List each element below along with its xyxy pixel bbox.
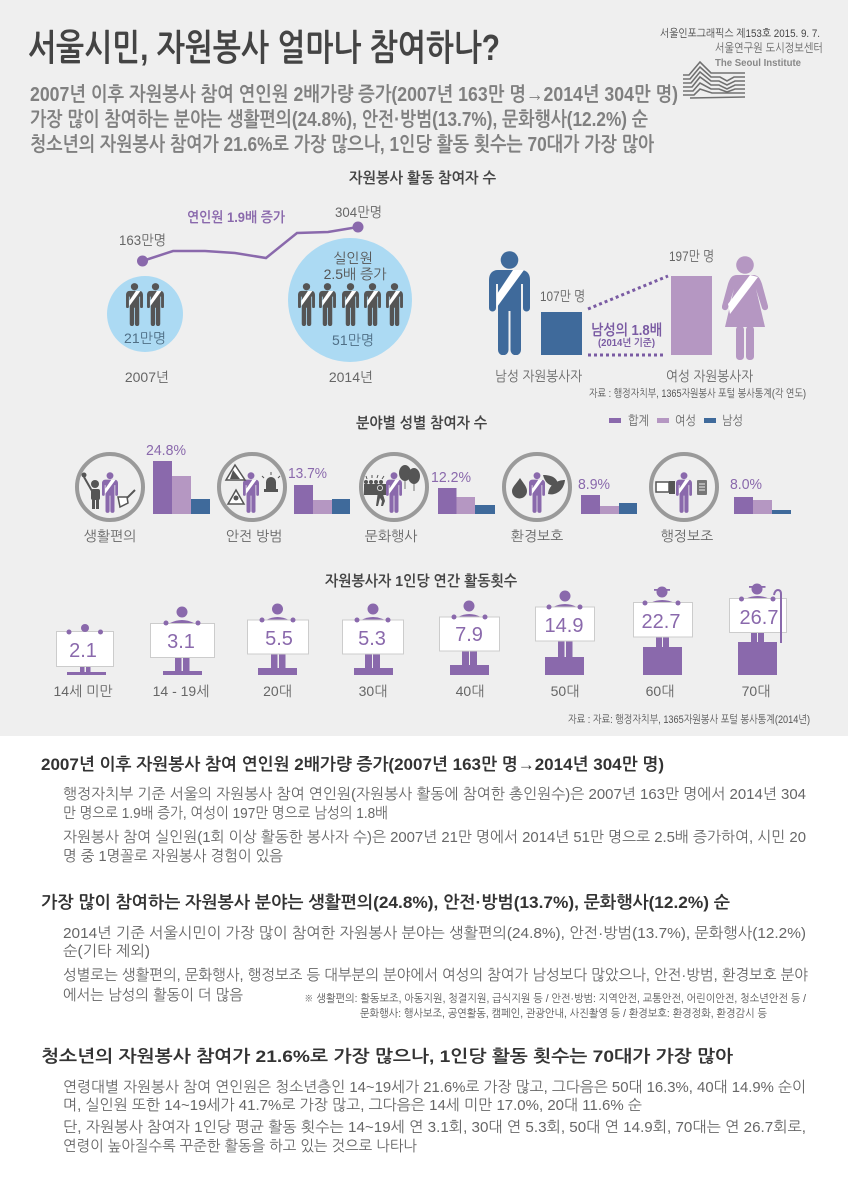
legend xyxy=(609,413,743,428)
heading: field: 분야별 성별 참여자 수 xyxy=(356,415,487,432)
text section 3: 단, 자원봉사 참여자 1인당 평균 활동 횟수는 14~19세 연 3.1회, 30대 연 5.3회, 50대 연 14.9회, 70대는 연 26.7회로, xyxy=(63,1119,806,1136)
footnote xyxy=(304,992,807,1020)
age: 70s xyxy=(730,584,786,699)
text section 1: 2007년 이후 자원봉사 참여 연인원 2배가량 증가(2007년 163만 명→2014년 304만 명) xyxy=(41,755,664,774)
category: 문화행사: 12.2% xyxy=(431,469,471,486)
bars xyxy=(438,488,495,514)
category: 생활편의: 생활편의 xyxy=(84,528,136,544)
age: 60s: 60대 xyxy=(646,683,674,699)
icon: admin support xyxy=(651,454,717,520)
age: 30s: 30대 xyxy=(359,683,387,699)
age: 20s: 5.5 xyxy=(265,628,293,650)
bubble: 2014 xyxy=(288,238,412,385)
legend: 남성 xyxy=(722,413,743,428)
age: 30s: 5.3 xyxy=(358,628,386,650)
age: 20s xyxy=(248,604,308,699)
icon: environment xyxy=(504,454,570,520)
age: 70s: 26.7 xyxy=(740,607,778,629)
text section 1: 자원봉사 참여 실인원(1회 이상 활동한 봉사자 수)은 2007년 21만 명에서 2014년 51만 명으로 2.5배 증가하여, 시민 20 xyxy=(63,829,806,846)
age: 40s xyxy=(440,600,500,699)
text section 3: 연령대별 자원봉사 참여 연인원은 청소년층인 14~19세가 21.6%로 가장 많고, 그다음은 50대 16.3%, 40대 14.9% 순이 xyxy=(63,1079,806,1096)
bar: male xyxy=(541,312,582,355)
title: 서울시민, 자원봉사 얼마나 참여하나? xyxy=(28,27,500,68)
logo: The Seoul Institute: 서울연구원 도시정보센터 xyxy=(715,41,823,55)
infographic background panel xyxy=(0,0,848,736)
value labels: 107만 명 xyxy=(540,288,585,304)
category: 문화행사: 문화행사 xyxy=(365,528,418,544)
text section 2: 순(기타 제외) xyxy=(63,943,150,960)
value labels: 남성 자원봉사자 xyxy=(495,368,583,384)
footnote: ※ 생활편의: 활동보조, 아동지원, 청결지원, 급식지원 등 / 안전·방범: 지역안전, 교통안전, 어린이안전, 청소년안전 등 / xyxy=(304,992,807,1005)
age: 20s: 20대 xyxy=(263,683,292,699)
category: 환경보호: 8.9% xyxy=(578,476,610,493)
value labels xyxy=(495,248,754,384)
value labels: 여성 자원봉사자 xyxy=(666,368,754,384)
age: 60s xyxy=(634,586,692,699)
category: 안전 방범: 안전 방범 xyxy=(226,528,282,544)
icon: culture event xyxy=(361,454,427,520)
heading: activity count: 자원봉사자 1인당 연간 활동횟수 xyxy=(325,573,517,590)
bars xyxy=(581,495,637,514)
logo: The Seoul Institute: The Seoul Institute xyxy=(715,58,801,69)
text section 3: 며, 실인원 또한 14~19세가 41.7%로 가장 많고, 그다음은 14세 미만 17.0%, 20대 11.6% 순 xyxy=(63,1097,642,1114)
logo: The Seoul Institute xyxy=(683,41,823,98)
bubble: 2014: 2014년 xyxy=(329,369,373,385)
chart: male vs female volunteers xyxy=(489,248,768,384)
value labels: 남성의 1.8배 xyxy=(591,322,662,339)
text section 1 xyxy=(41,755,806,865)
bubble: 2007: 2007년 xyxy=(125,369,169,385)
age: 50s: 50대 xyxy=(551,683,579,699)
bars xyxy=(153,461,210,514)
age: 70s: 70대 xyxy=(742,683,770,699)
bubble: 2014: 2.5배 증가 xyxy=(324,266,387,282)
age: under 14: 2.1 xyxy=(69,640,97,662)
text section 1: 만 명으로 1.9배 증가, 여성이 197만 명으로 남성의 1.8배 xyxy=(63,805,388,822)
text section 1: 명 중 1명꼴로 자원봉사 경험이 있음 xyxy=(63,848,283,865)
bars xyxy=(294,485,350,514)
category: 문화행사 xyxy=(361,454,495,544)
bubble: 2007: 21만명 xyxy=(124,330,166,346)
subtitle text block: 가장 많이 참여하는 분야는 생활편의(24.8%), 안전·방범(13.7%), 문화행사(12.2%) 순 xyxy=(30,108,648,131)
icon: safety xyxy=(219,454,285,520)
age: 14-19: 14 - 19세 xyxy=(153,683,209,699)
footnote: 문화행사: 행사보조, 공연활동, 캠페인, 관광안내, 사진촬영 등 / 환경보호: 환경정화, 환경감시 등 xyxy=(360,1007,768,1020)
category: 행정보조: 행정보조 xyxy=(661,528,713,544)
heading: participants: 자원봉사 활동 참여자 수 xyxy=(349,170,496,187)
line: cumulative participants: 163만명 xyxy=(119,232,166,248)
text section 3: 청소년의 자원봉사 참여가 21.6%로 가장 많으나, 1인당 활동 횟수는 70대가 가장 많아 xyxy=(41,1047,733,1066)
text section 3: 연령이 높아질수록 꾸준한 활동을 하고 있는 것으로 나타나 xyxy=(63,1138,418,1155)
text section 2: 가장 많이 참여하는 자원봉사 분야는 생활편의(24.8%), 안전·방범(13.7%), 문화행사(12.2%) 순 xyxy=(41,893,730,912)
icon: woman xyxy=(722,256,768,360)
value labels: 197만 명 xyxy=(669,248,714,264)
line: cumulative participants: 연인원 1.9배 증가 xyxy=(187,209,286,225)
bubble: 2007 xyxy=(107,276,183,385)
age: 14-19: 3.1 xyxy=(167,631,195,653)
subtitle text block xyxy=(30,84,678,156)
category: 환경보호: 환경보호 xyxy=(511,528,563,544)
age: 40s: 7.9 xyxy=(455,624,483,646)
age: 50s: 14.9 xyxy=(545,615,583,637)
subtitle text block: 청소년의 자원봉사 참여가 21.6%로 가장 많으나, 1인당 활동 횟수는 70대가 가장 많아 xyxy=(30,133,654,156)
text section 2: 성별로는 생활편의, 문화행사, 행정보조 등 대부분의 분야에서 여성의 참여가 남성보다 많았으나, 안전·방범, 환경보호 분야 xyxy=(63,967,809,984)
category: 행정보조 xyxy=(651,454,791,544)
age: 30s xyxy=(342,604,404,699)
category: 생활편의: 24.8% xyxy=(146,442,186,459)
text section 2 xyxy=(41,893,809,1020)
category: 안전 방범 xyxy=(219,454,350,544)
age: 50s xyxy=(536,590,594,699)
age: 14-19 xyxy=(150,606,214,699)
icon: daily convenience xyxy=(77,454,143,520)
bubble: 2014: 51만명 xyxy=(332,332,374,348)
legend: 여성 xyxy=(675,413,696,428)
category: 행정보조: 8.0% xyxy=(730,476,762,493)
value labels: (2014년 기준) xyxy=(598,337,655,349)
publication info: 서울인포그래픽스 제153호 2015. 9. 7. xyxy=(660,27,820,40)
text section 2: 에서는 남성의 활동이 더 많음 xyxy=(63,987,243,1004)
category: 안전 방범: 13.7% xyxy=(288,465,327,482)
age: under 14: 14세 미만 xyxy=(54,683,112,699)
bar: female xyxy=(671,276,712,355)
bubble: 2014: 실인원 xyxy=(333,250,373,266)
text section 3 xyxy=(41,1047,806,1155)
icon: man xyxy=(489,251,530,355)
age: 40s: 40대 xyxy=(456,683,484,699)
bars xyxy=(734,497,791,514)
comparison dotted lines xyxy=(588,276,668,355)
age: 60s: 22.7 xyxy=(642,611,680,633)
text section 1: 행정자치부 기준 서울의 자원봉사 참여 연인원(자원봉사 활동에 참여한 총인원수)은 2007년 163만 명에서 2014년 304 xyxy=(63,786,806,803)
text section 2: 2014년 기준 서울시민이 가장 많이 참여한 자원봉사 분야는 생활편의(24.8%), 안전·방범(13.7%), 문화행사(12.2%) xyxy=(63,925,806,942)
age: under 14 xyxy=(54,624,114,699)
category: 생활편의 xyxy=(77,442,210,544)
subtitle text block: 2007년 이후 자원봉사 참여 연인원 2배가량 증가(2007년 163만 명→2014년 304만 명) xyxy=(30,84,678,106)
legend: 합계 xyxy=(628,413,649,428)
line: cumulative participants xyxy=(119,204,382,266)
source 1: 자료 : 행정자치부, 1365자원봉사 포털 봉사통계(각 연도) xyxy=(589,387,806,400)
chart: total volunteers line and bubbles by year xyxy=(107,204,412,385)
line: cumulative participants: 304만명 xyxy=(335,204,382,220)
category: 환경보호 xyxy=(504,454,637,544)
